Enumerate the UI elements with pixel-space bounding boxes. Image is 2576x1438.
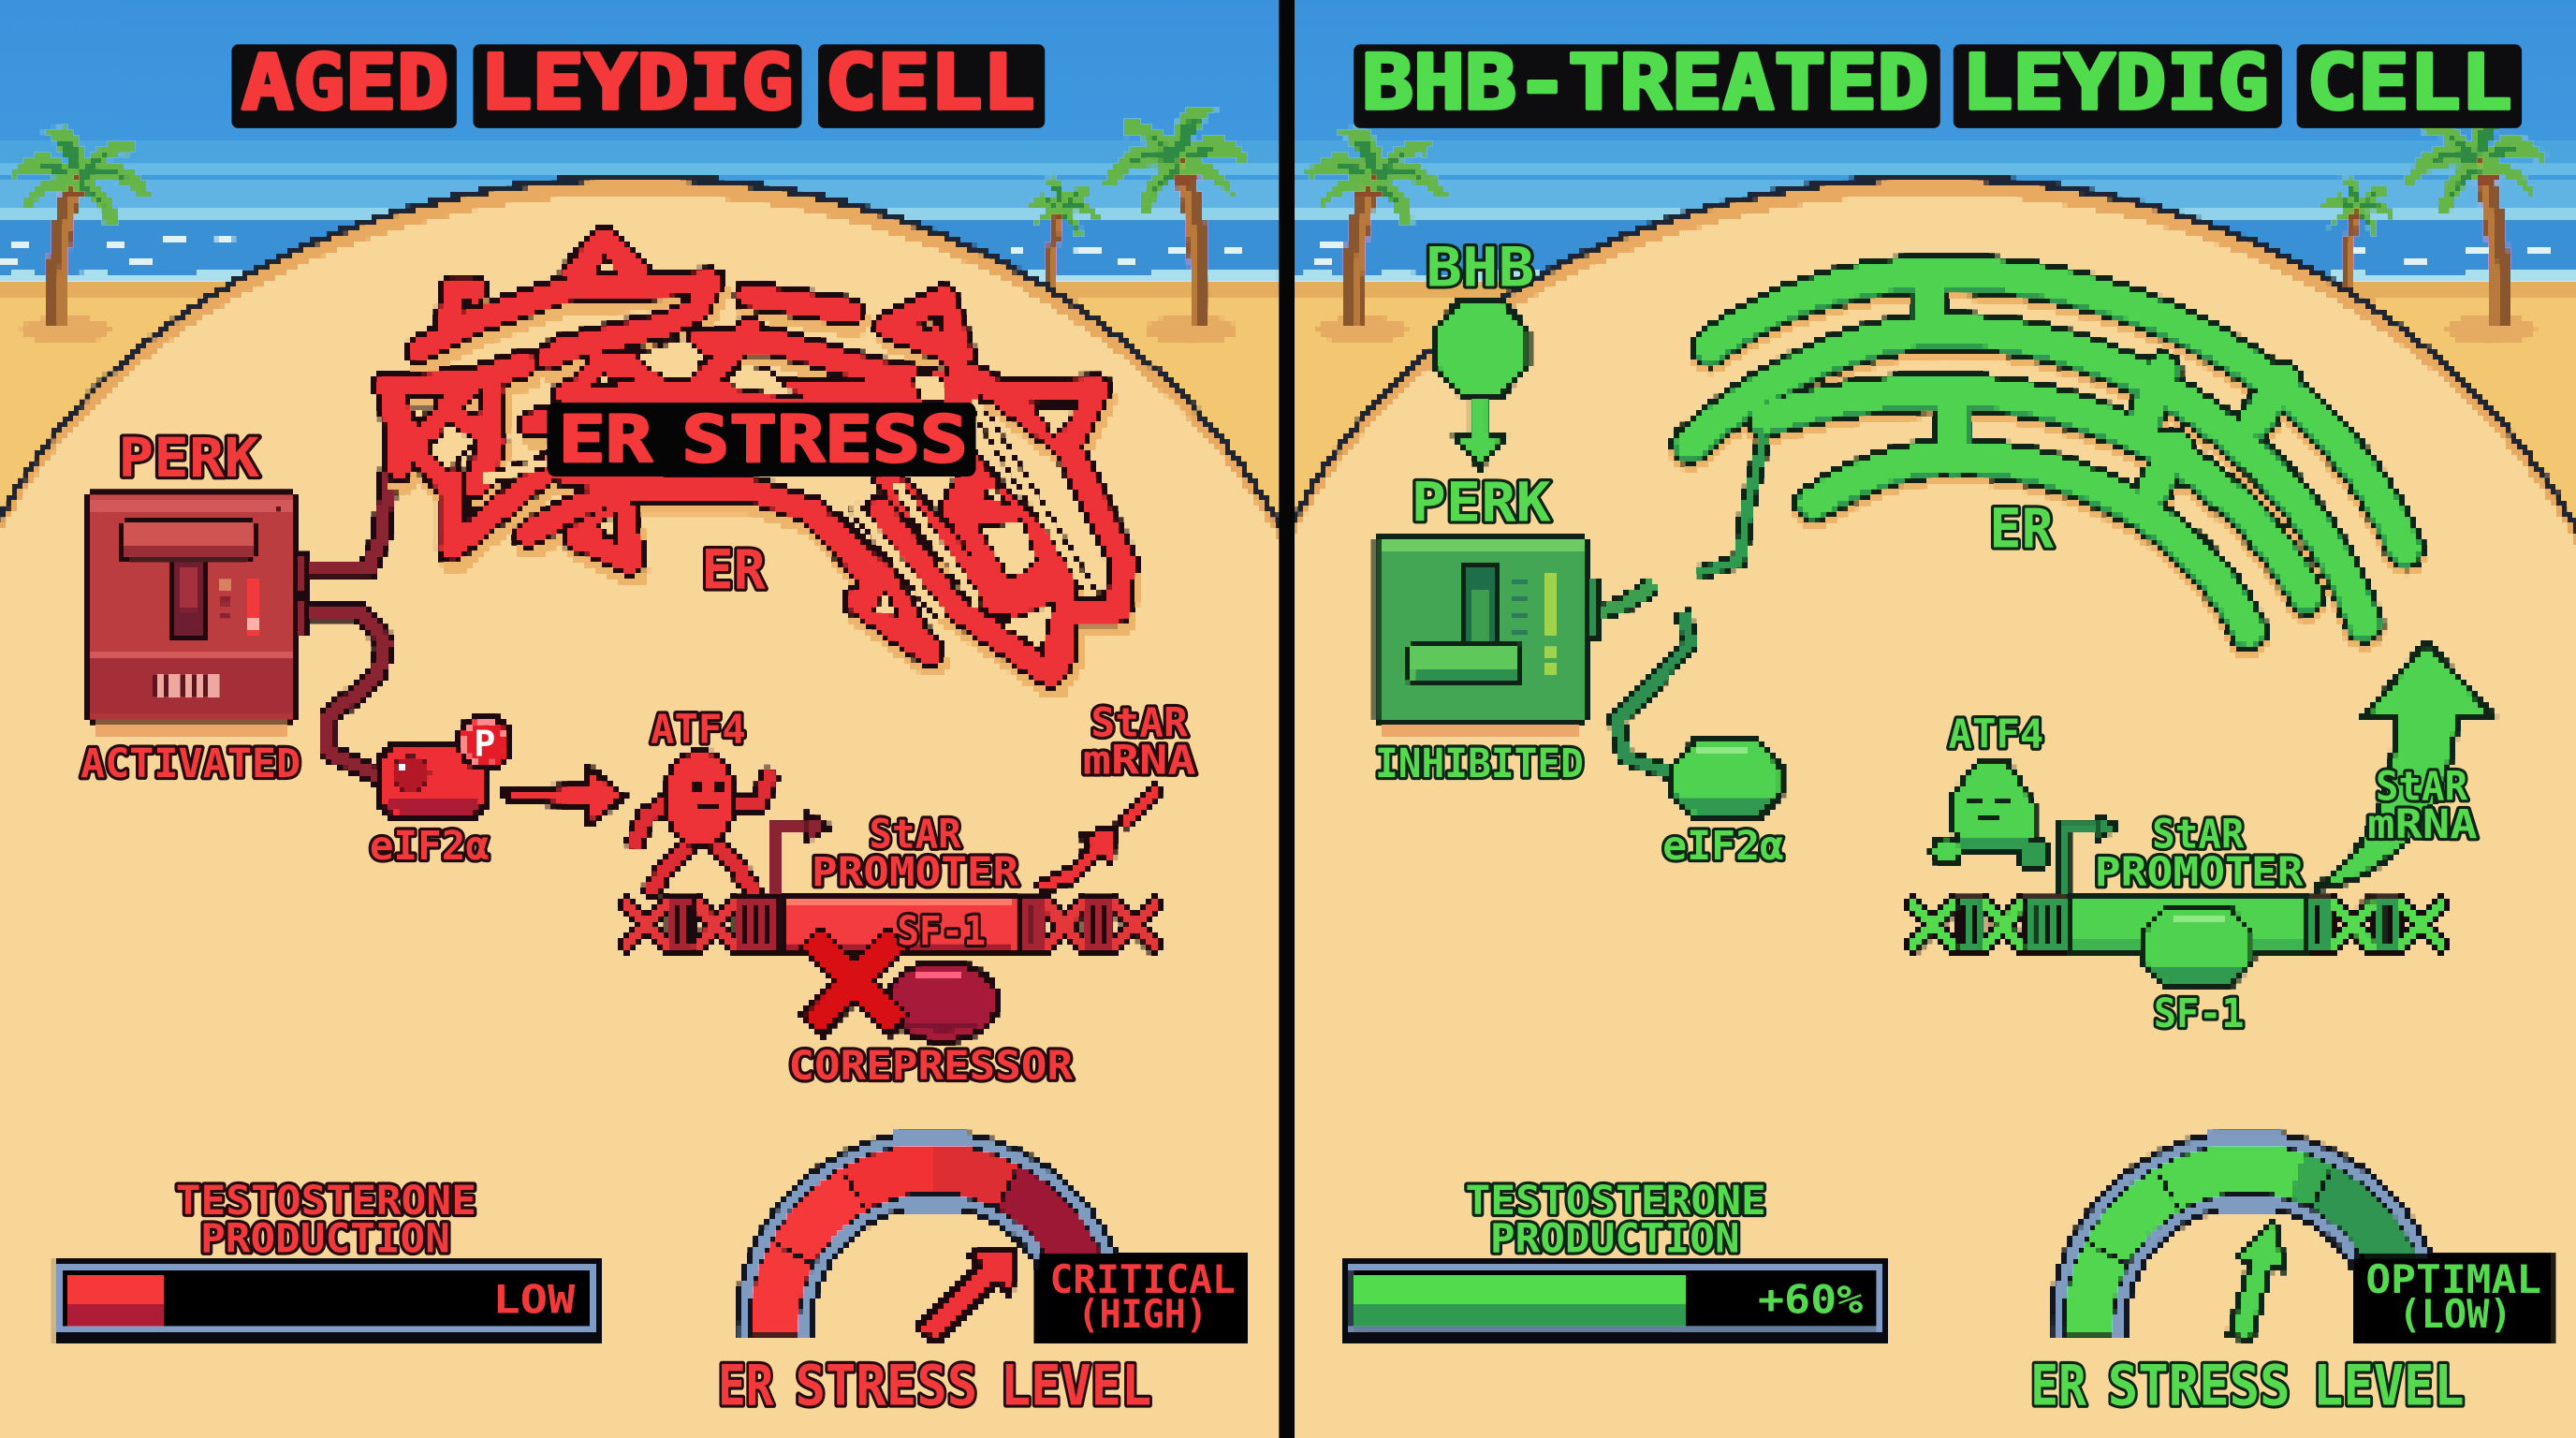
tangled stressed ER [388, 240, 1127, 683]
icon: PERK switch box, activated [87, 494, 307, 735]
ER holes and slits [409, 255, 1076, 649]
label: PROMOTER: PROMOTER [2095, 849, 2304, 896]
icon: SF-1 bound [2143, 907, 2252, 986]
icon: eIF2 alpha [1673, 741, 1781, 818]
label: TESTOSTERONE: TESTOSTERONE [1466, 1178, 1766, 1225]
label: ATF4: ATF4 [1949, 712, 2043, 758]
label: ATF4: ATF4 [651, 706, 746, 753]
label: ER STRESS: STRESS [681, 403, 968, 477]
label: TESTOSTERONE: TESTOSTERONE [176, 1178, 476, 1225]
label: ER STRESS LEVEL: STRESS [795, 1355, 977, 1419]
arrow: promoter to mRNA [1038, 827, 1114, 892]
arrow: promoter start site [2063, 815, 2117, 896]
value: LOW: LOW [493, 1276, 576, 1322]
healthy ER [1690, 272, 2405, 638]
label: PERK: PERK [118, 426, 259, 490]
title: BHB-TREATED LEYDIG CELL: LEYDIG [1962, 39, 2269, 127]
illustration: treated cell pathway [1342, 272, 2553, 1344]
label: ER STRESS: ER [559, 403, 653, 477]
label: ER: ER [701, 537, 766, 601]
label: SF-1: SF-1 [2154, 990, 2244, 1037]
arrow: promoter start site [775, 815, 829, 896]
center divider [1279, 0, 1295, 1438]
panel: aged Leydig cell [54, 39, 1249, 1419]
icon: BHB molecule with arrow [1434, 301, 1528, 466]
title: BHB-TREATED LEYDIG CELL: BHB-TREATED [1362, 39, 1928, 127]
DNA with StAR promoter [626, 897, 1153, 953]
value: (LOW): (LOW) [2398, 1291, 2512, 1337]
value: +60%: +60% [1758, 1276, 1864, 1322]
cell membrane dome, aged panel [0, 178, 1290, 1438]
cable: PERK to eIF2 alpha [304, 611, 386, 777]
label: ER STRESS LEVEL: LEVEL [1001, 1355, 1151, 1419]
label: PERK: PERK [1412, 470, 1551, 534]
panel: BHB-treated Leydig cell [1342, 39, 2553, 1419]
title: AGED LEYDIG CELL: LEYDIG [479, 39, 794, 127]
label: PRODUCTION: PRODUCTION [200, 1215, 450, 1262]
gauge: ER stress optimal [2085, 1132, 2407, 1338]
icon: corepressor [889, 962, 997, 1041]
icon: StAR mRNA strand [1125, 790, 1155, 822]
title: AGED LEYDIG CELL: AGED [242, 39, 448, 127]
label: StAR: StAR [869, 812, 961, 858]
gauge status box [2356, 1255, 2553, 1344]
gauge needle [2230, 1221, 2285, 1341]
label: ACTIVATED: ACTIVATED [80, 741, 300, 787]
palm trees, BHB panel [1303, 106, 2550, 345]
label: ER STRESS LEVEL [718, 1355, 1151, 1419]
label: INHIBITED: INHIBITED [1375, 741, 1584, 787]
gauge status box [1036, 1255, 1249, 1344]
label: ER STRESS LEVEL: STRESS [2108, 1355, 2291, 1419]
big arrow: StAR mRNA up [2315, 642, 2494, 889]
title: AGED LEYDIG CELL [231, 39, 1045, 128]
label: COREPRESSOR: COREPRESSOR [788, 1043, 1073, 1090]
title: AGED LEYDIG CELL: CELL [825, 39, 1035, 127]
cell membrane dome, BHB panel [1286, 178, 2576, 1438]
label: P phospho: P [474, 723, 495, 765]
cable: to eIF2 alpha [1617, 611, 1690, 774]
illustration: aged cell pathway [54, 240, 1249, 1344]
label: eIF2 alpha: eIF2α [370, 823, 490, 870]
value: CRITICAL: CRITICAL [1050, 1256, 1236, 1302]
label: ER STRESS [547, 403, 976, 477]
bar chart: testosterone production +60% [1342, 1260, 1888, 1344]
gauge needle [916, 1249, 1016, 1343]
broken cable: PERK to ER [1592, 435, 1764, 614]
label: eIF2 alpha: eIF2α [1662, 823, 1784, 870]
title: BHB-TREATED LEYDIG CELL [1354, 39, 2522, 128]
palm trees, aged panel [7, 106, 1251, 345]
DNA with StAR promoter [1914, 897, 2441, 953]
label: StAR: StAR [2152, 812, 2245, 858]
label: PRODUCTION: PRODUCTION [1490, 1215, 1740, 1262]
icon: PERK switch box, inhibited [1377, 537, 1599, 736]
label: StAR mRNA second line: mRNA [1083, 738, 1196, 785]
label: StAR mRNA second line: mRNA [2367, 801, 2478, 848]
icon: eIF2 alpha phosphorylated [379, 716, 511, 818]
label: ER STRESS LEVEL [2030, 1355, 2465, 1419]
label: ER STRESS LEVEL: ER [2030, 1355, 2086, 1419]
label: BHB: BHB [1426, 235, 1534, 299]
value: OPTIMAL: OPTIMAL [2365, 1256, 2541, 1302]
character: ATF4 [636, 751, 768, 890]
gauge: ER stress critical [770, 1132, 1091, 1338]
label: PROMOTER: PROMOTER [812, 849, 1018, 896]
label: ER: ER [1989, 496, 2054, 560]
value: (HIGH): (HIGH) [1077, 1291, 1208, 1337]
label: SF-1: SF-1 [897, 908, 986, 955]
icon: blocking X [822, 946, 889, 1016]
character: ATF4 resting [1932, 762, 2049, 869]
label: StAR mRNA: StAR [1090, 699, 1188, 746]
cable: PERK to ER [304, 460, 391, 570]
arrow: eIF2 alpha to ATF4 [501, 768, 624, 825]
label: ER STRESS LEVEL: LEVEL [2313, 1355, 2465, 1419]
label: StAR mRNA: StAR [2376, 764, 2467, 811]
bar chart: testosterone production low [54, 1260, 600, 1344]
label: ER STRESS LEVEL: ER [718, 1355, 774, 1419]
title: BHB-TREATED LEYDIG CELL: CELL [2306, 39, 2512, 127]
